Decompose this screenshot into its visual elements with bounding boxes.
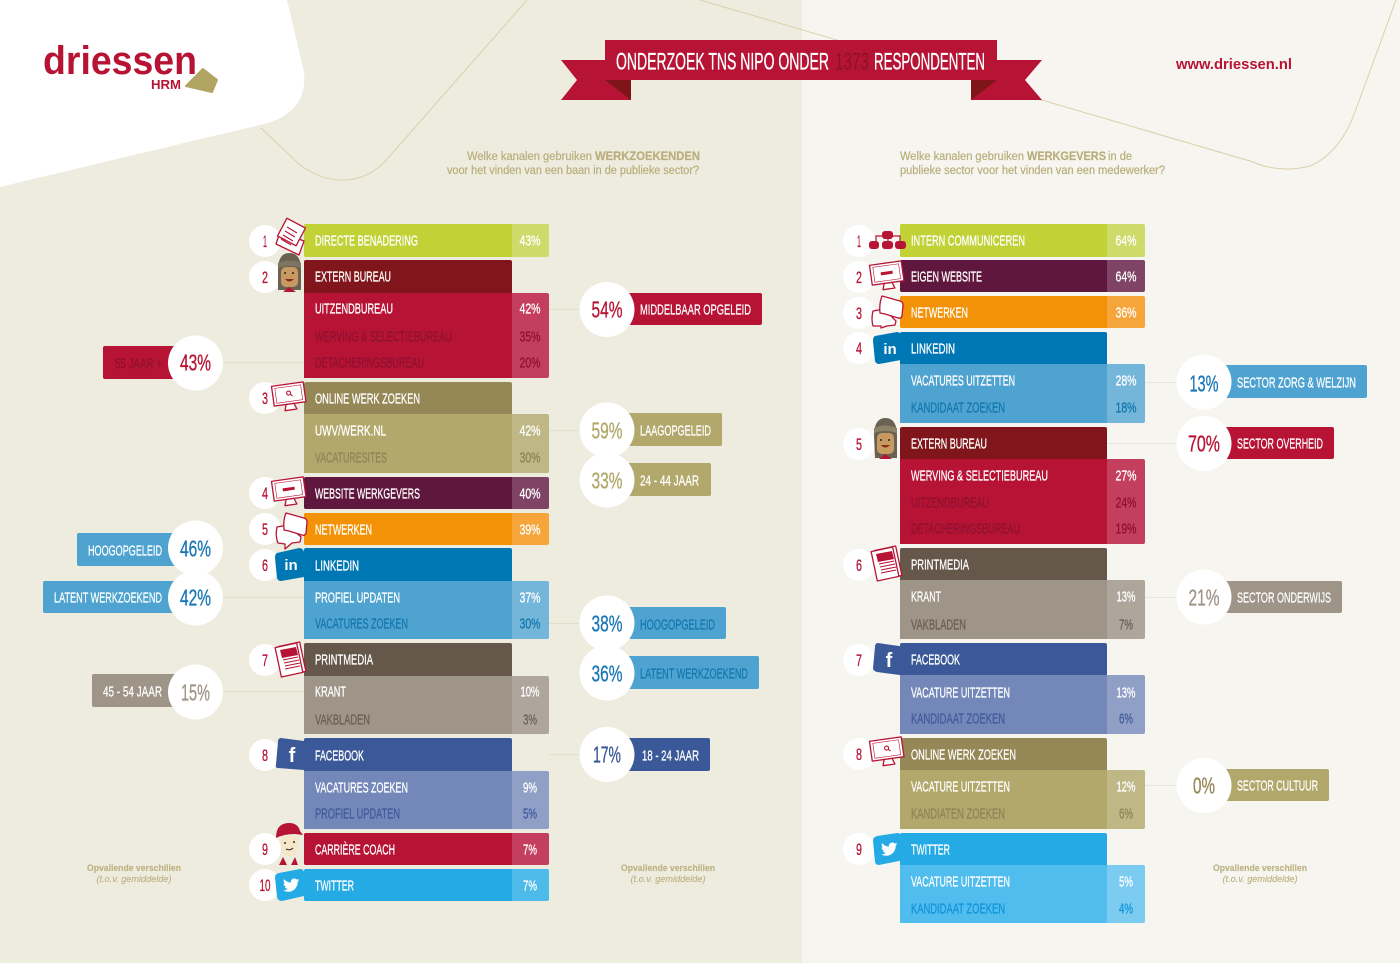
row: facebook [304,738,549,829]
callout: 45-54 jaar: 45 - 54 JAAR [103,684,162,700]
left ranking chart: werkzoekenden [249,224,549,901]
row: directe benadering: 43% [520,232,540,249]
rank numbers: 10 [260,876,270,895]
row: directe benadering [304,224,549,257]
row: facebook: 13% [1116,684,1136,701]
row: linkedin: VACATURES UITZETTEN [911,372,1015,389]
callout: latent werkzoekend [580,646,759,700]
callout: sector zorg en welzijn: 13% [1190,370,1218,396]
row: twitter: 4% [1119,900,1133,917]
row: linkedin: 37% [520,589,540,606]
row: extern bureau: 20% [520,354,540,371]
row: intern communiceren [900,224,1145,257]
icon: linkedin [873,332,901,364]
row: twitter: 5% [1119,873,1133,890]
footnote right: (t.o.v. gemiddelde) [1222,874,1298,885]
decorative curve right [700,0,1396,169]
row: extern bureau [304,260,549,378]
row: carriere coach: 7% [523,841,537,858]
rank numbers [856,232,862,859]
footnote right [1213,863,1307,885]
row: extern bureau: 19% [1116,520,1136,537]
row: intern communiceren: INTERN COMMUNICEREN [911,232,1025,249]
icon: www monitor [869,261,905,291]
right question [900,151,1165,177]
row: extern bureau: 24% [1116,494,1136,511]
row: extern bureau: WERVING & SELECTIEBUREAU [315,328,452,345]
callout: latent werkzoekend: LATENT WERKZOEKEND [54,590,162,606]
row: twitter: TWITTER [315,877,354,894]
icon: career coach [276,823,303,865]
row: online werk zoeken: VACATURESITES [315,449,387,466]
right question: publieke sector voor het vinden van een medewerker? [900,165,1165,177]
row: eigen website [900,260,1145,292]
row: extern bureau: DETACHERINGSBUREAU [315,354,424,371]
row: online werk zoeken: VACATURE UITZETTEN [911,778,1010,795]
left question: WERKZOEKENDEN [595,151,700,163]
callout: sector onderwijs: SECTOR ONDERWIJS [1237,590,1331,606]
row: online werk zoeken: ONLINE WERK ZOEKEN [315,390,420,407]
callout: 55 jaar +: 55 JAAR + [115,356,162,372]
icon: speech bubbles [872,296,903,328]
icon: recruiter person [874,418,897,459]
callout: sector zorg en welzijn [1176,354,1367,410]
callout: 55 jaar +: 43% [180,349,211,375]
row: carriere coach: CARRIÈRE COACH [315,841,395,858]
row: printmedia: 3% [523,711,537,728]
row: printmedia: PRINTMEDIA [911,556,969,573]
icon: letter [276,218,305,255]
row: extern bureau: EXTERN BUREAU [911,435,987,452]
rank numbers: 4 [856,339,862,358]
logo: HRM [151,77,181,92]
row: printmedia: KRANT [911,588,941,605]
row: extern bureau: UITZENDBUREAU [315,300,393,317]
title ribbon: 1373 [835,48,869,76]
row: twitter [304,869,549,901]
icon: facebook: f [289,745,296,767]
rank numbers: 2 [262,268,268,287]
row: netwerken [900,296,1145,328]
callout: sector onderwijs [1176,570,1342,624]
row: facebook: 5% [523,805,537,822]
title ribbon: RESPONDENTEN [874,48,985,76]
icon: org chart [869,231,906,249]
rank numbers: 4 [262,484,268,503]
row: printmedia: 13% [1116,588,1136,605]
footnote left: (t.o.v. gemiddelde) [96,874,172,885]
callout: hoogopgeleid [77,520,223,576]
row: extern bureau: 35% [520,328,540,345]
row: online werk zoeken: UWV/WERK.NL [315,422,386,439]
callout: latent werkzoekend: 36% [592,660,622,686]
row: extern bureau: UITZENDBUREAU [911,494,989,511]
right ranking chart: werkgevers [843,224,1145,923]
row: printmedia: VAKBLADEN [315,711,370,728]
row: netwerken: 39% [520,521,540,538]
rank numbers: 3 [856,304,862,323]
footnote center: Opvallende verschillen [621,863,715,874]
row: online werk zoeken: 12% [1116,778,1136,795]
right question: in de [1108,151,1132,163]
callout: sector cultuur: SECTOR CULTUUR [1237,778,1318,794]
row: website werkgevers [304,477,549,509]
logo: driessen [43,39,197,83]
row: printmedia: PRINTMEDIA [315,651,373,668]
callout: 24-44 jaar: 24 - 44 JAAR [640,473,699,489]
footnote center: (t.o.v. gemiddelde) [630,874,706,885]
rank numbers: 2 [856,268,862,287]
row: linkedin: PROFIEL UPDATEN [315,589,400,606]
row: extern bureau: DETACHERINGSBUREAU [911,520,1020,537]
background: left panel [0,0,802,963]
row: extern bureau [900,427,1145,544]
left question: Welke kanalen gebruiken [467,151,592,163]
row: printmedia [900,548,1145,639]
rank numbers: 9 [856,840,862,859]
callout: 24-44 jaar [580,452,711,508]
callout: middelbaar opgeleid: MIDDELBAAR OPGELEID [640,302,751,318]
row: directe benadering: DIRECTE BENADERING [315,232,418,249]
number circles [249,225,281,901]
callout: hoogopgeleid: 46% [180,535,211,561]
callout: laagopgeleid [580,402,722,458]
white logo panel [0,0,304,187]
row: facebook: FACEBOOK [315,747,364,764]
callout: 45-54 jaar [92,664,223,720]
row: eigen website: EIGEN WEBSITE [911,268,982,285]
row: netwerken: 36% [1116,304,1136,321]
rank numbers: 7 [262,651,268,670]
callout: 45-54 jaar: 15% [181,679,210,705]
row: online werk zoeken [900,738,1145,829]
callout: 55 jaar + [103,336,223,390]
title ribbon: ONDERZOEK TNS NIPO ONDER [616,48,829,76]
icon: facebook [276,738,304,770]
icon: newspaper [275,642,306,677]
row: linkedin [900,332,1145,423]
row: facebook: 6% [1119,710,1133,727]
row: printmedia: KRANT [315,683,346,700]
row: facebook: FACEBOOK [911,651,960,668]
callout: 18-24 jaar [580,727,710,782]
rank numbers: 6 [856,556,862,575]
row: online werk zoeken: 6% [1119,805,1133,822]
rank numbers: 3 [262,389,268,408]
callout: hoogopgeleid: 38% [592,610,622,636]
rank numbers: 9 [262,840,268,859]
row: extern bureau: EXTERN BUREAU [315,268,391,285]
icon: search monitor [869,737,905,767]
row: website werkgevers: 40% [520,485,540,502]
row: extern bureau: WERVING & SELECTIEBUREAU [911,467,1048,484]
website url: www.driessen.nl [1175,56,1292,73]
rank numbers: 7 [856,651,862,670]
row: facebook: PROFIEL UPDATEN [315,805,400,822]
callout: hoogopgeleid: HOOGOPGELEID [640,617,715,633]
callout: sector cultuur [1176,758,1329,813]
rank numbers: 1 [857,232,861,251]
footnote right: Opvallende verschillen [1213,863,1307,874]
icon: www monitor [271,477,307,507]
callout: sector onderwijs: 21% [1188,584,1220,610]
row: netwerken: NETWERKEN [911,304,968,321]
callout: latent werkzoekend: 42% [180,584,211,610]
row: facebook [900,643,1145,734]
callout: hoogopgeleid: HOOGOPGELEID [88,543,162,559]
row: twitter: TWITTER [911,841,950,858]
rank numbers: 5 [262,520,268,539]
callout: sector cultuur: 0% [1193,772,1215,798]
footnote left [87,863,181,885]
row: netwerken [304,513,549,545]
icon: newspaper [871,546,902,581]
row: facebook: VACATURE UITZETTEN [911,684,1010,701]
icon: twitter [873,833,904,865]
row: facebook: 9% [523,779,537,796]
row: linkedin: 18% [1116,399,1136,416]
row: twitter: 7% [523,877,537,894]
icon: search monitor [271,382,307,412]
callout: 18-24 jaar: 18 - 24 JAAR [642,748,699,764]
row: netwerken: NETWERKEN [315,521,372,538]
rank numbers: 5 [856,435,862,454]
row: online werk zoeken: ONLINE WERK ZOEKEN [911,746,1016,763]
callout: laagopgeleid: LAAGOPGELEID [640,423,711,439]
rank numbers: 6 [262,556,268,575]
background: right panel [802,0,1400,963]
leader lines [223,310,1177,786]
row: twitter [900,833,1145,923]
rank numbers [260,232,270,895]
row: printmedia: 10% [520,683,540,700]
row: facebook: VACATURES ZOEKEN [315,779,408,796]
number circles [843,225,875,865]
row: carriere coach [304,833,549,865]
callout: middelbaar opgeleid: 54% [592,296,622,322]
left question: voor het vinden van een baan in de publieke sector? [447,165,699,177]
callout: 24-44 jaar: 33% [592,467,622,493]
row: linkedin: VACATURES ZOEKEN [315,615,408,632]
rank numbers: 8 [262,746,268,765]
callout: sector overheid [1176,416,1334,471]
row: online werk zoeken: KANDIATEN ZOEKEN [911,805,1005,822]
icon: speech bubbles [276,513,307,549]
decorative curve [261,0,527,180]
row: extern bureau: 42% [520,300,540,317]
rank numbers: 8 [856,745,862,764]
icon: facebook: f [886,650,893,672]
title ribbon [561,40,1042,100]
row: linkedin [304,548,549,639]
icon: linkedin [275,548,304,581]
row: online werk zoeken: 42% [520,422,540,439]
row: printmedia: 7% [1119,616,1133,633]
row: twitter: KANDIDAAT ZOEKEN [911,900,1005,917]
callout: latent werkzoekend: LATENT WERKZOEKEND [640,666,748,682]
row: intern communiceren: 64% [1116,232,1136,249]
row: facebook: KANDIDAAT ZOEKEN [911,710,1005,727]
row: linkedin: 28% [1116,372,1136,389]
row: twitter: VACATURE UITZETTEN [911,873,1010,890]
left question [447,151,700,177]
row: online werk zoeken [304,382,549,473]
footnote left: Opvallende verschillen [87,863,181,874]
row: printmedia [304,643,549,734]
callout: middelbaar opgeleid [580,282,762,337]
callout: laagopgeleid: 59% [592,417,622,443]
row: extern bureau: 27% [1116,467,1136,484]
callout: latent werkzoekend [43,570,223,626]
callout: sector overheid: 70% [1188,430,1220,456]
row: printmedia: VAKBLADEN [911,616,966,633]
rank numbers: 1 [263,232,267,251]
footnote center [621,863,715,885]
callout: sector overheid: SECTOR OVERHEID [1237,436,1323,452]
icon: recruiter person [278,253,301,292]
row: linkedin: LINKEDIN [315,557,359,574]
callout: 18-24 jaar: 17% [593,741,621,767]
row: eigen website: 64% [1116,268,1136,285]
row: linkedin: 30% [520,615,540,632]
icon: linkedin: in [284,557,298,574]
row: linkedin: KANDIDAAT ZOEKEN [911,399,1005,416]
icon: linkedin: in [883,341,897,358]
callout: hoogopgeleid [580,596,726,650]
right question: WERKGEVERS [1027,151,1106,163]
right question: Welke kanalen gebruiken [900,151,1024,163]
row: website werkgevers: WEBSITE WERKGEVERS [315,485,420,502]
row: linkedin: LINKEDIN [911,340,955,357]
row: online werk zoeken: 30% [520,449,540,466]
icon: facebook [873,643,902,675]
icon: twitter [275,869,304,901]
